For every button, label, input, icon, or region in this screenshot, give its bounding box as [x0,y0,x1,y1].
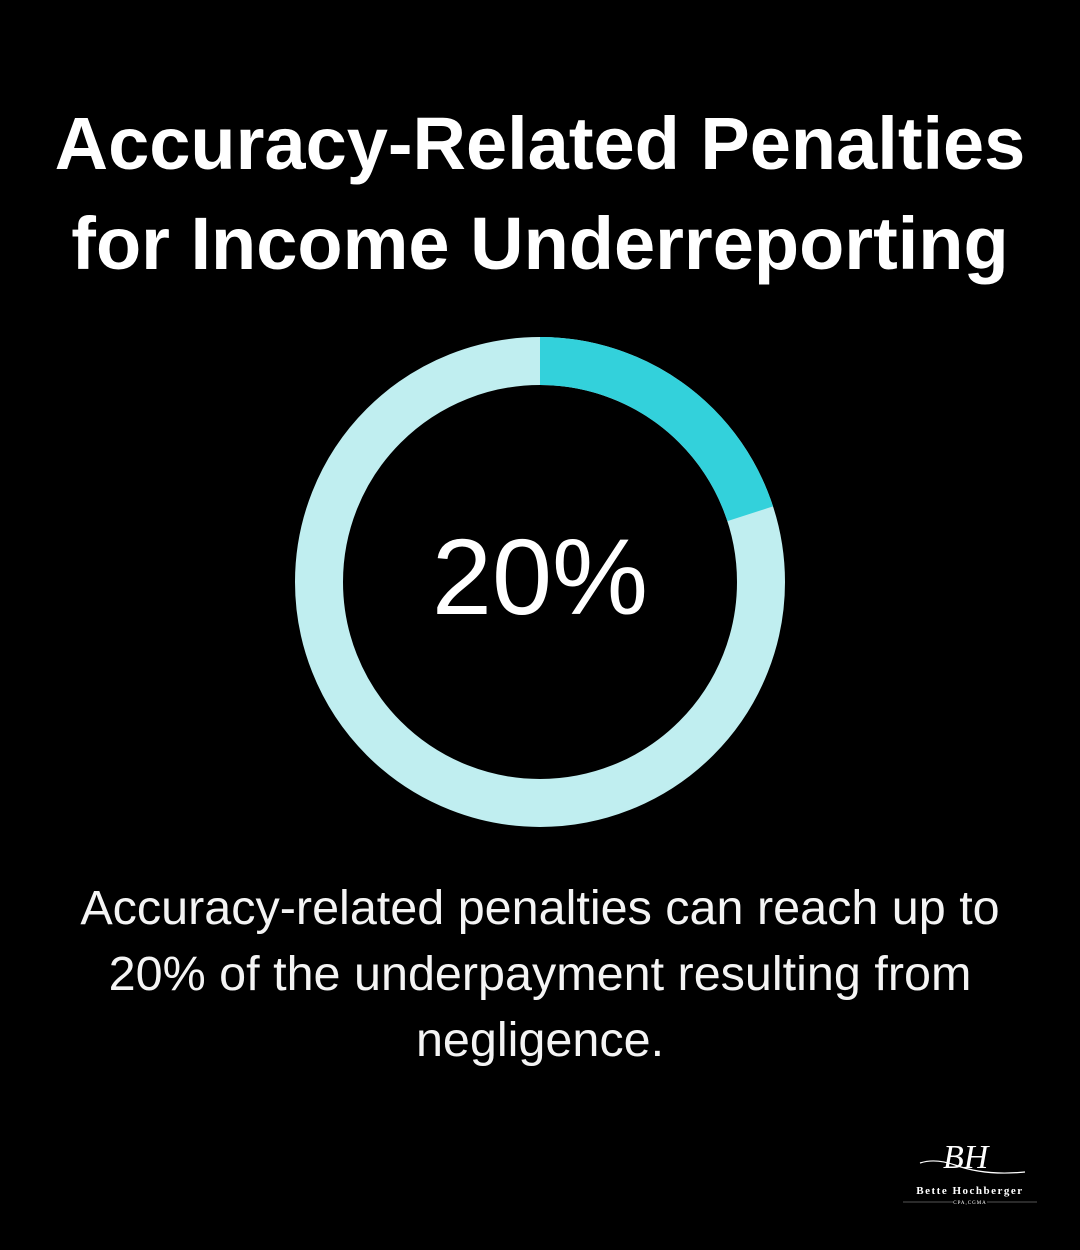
donut chart: 20% [432,516,648,637]
body text: 20% of the underpayment resulting from [109,947,971,1001]
title [55,102,1025,285]
logo: CPA,CGMA [953,1201,987,1206]
body text [80,881,1000,1067]
body text: negligence. [416,1013,664,1067]
logo [903,1139,1037,1206]
logo: BH [943,1139,991,1176]
logo: Bette Hochberger [916,1185,1024,1197]
title: Accuracy-Related Penalties [55,102,1025,185]
body text: Accuracy-related penalties can reach up to [80,881,1000,935]
title: for Income Underreporting [71,202,1009,285]
